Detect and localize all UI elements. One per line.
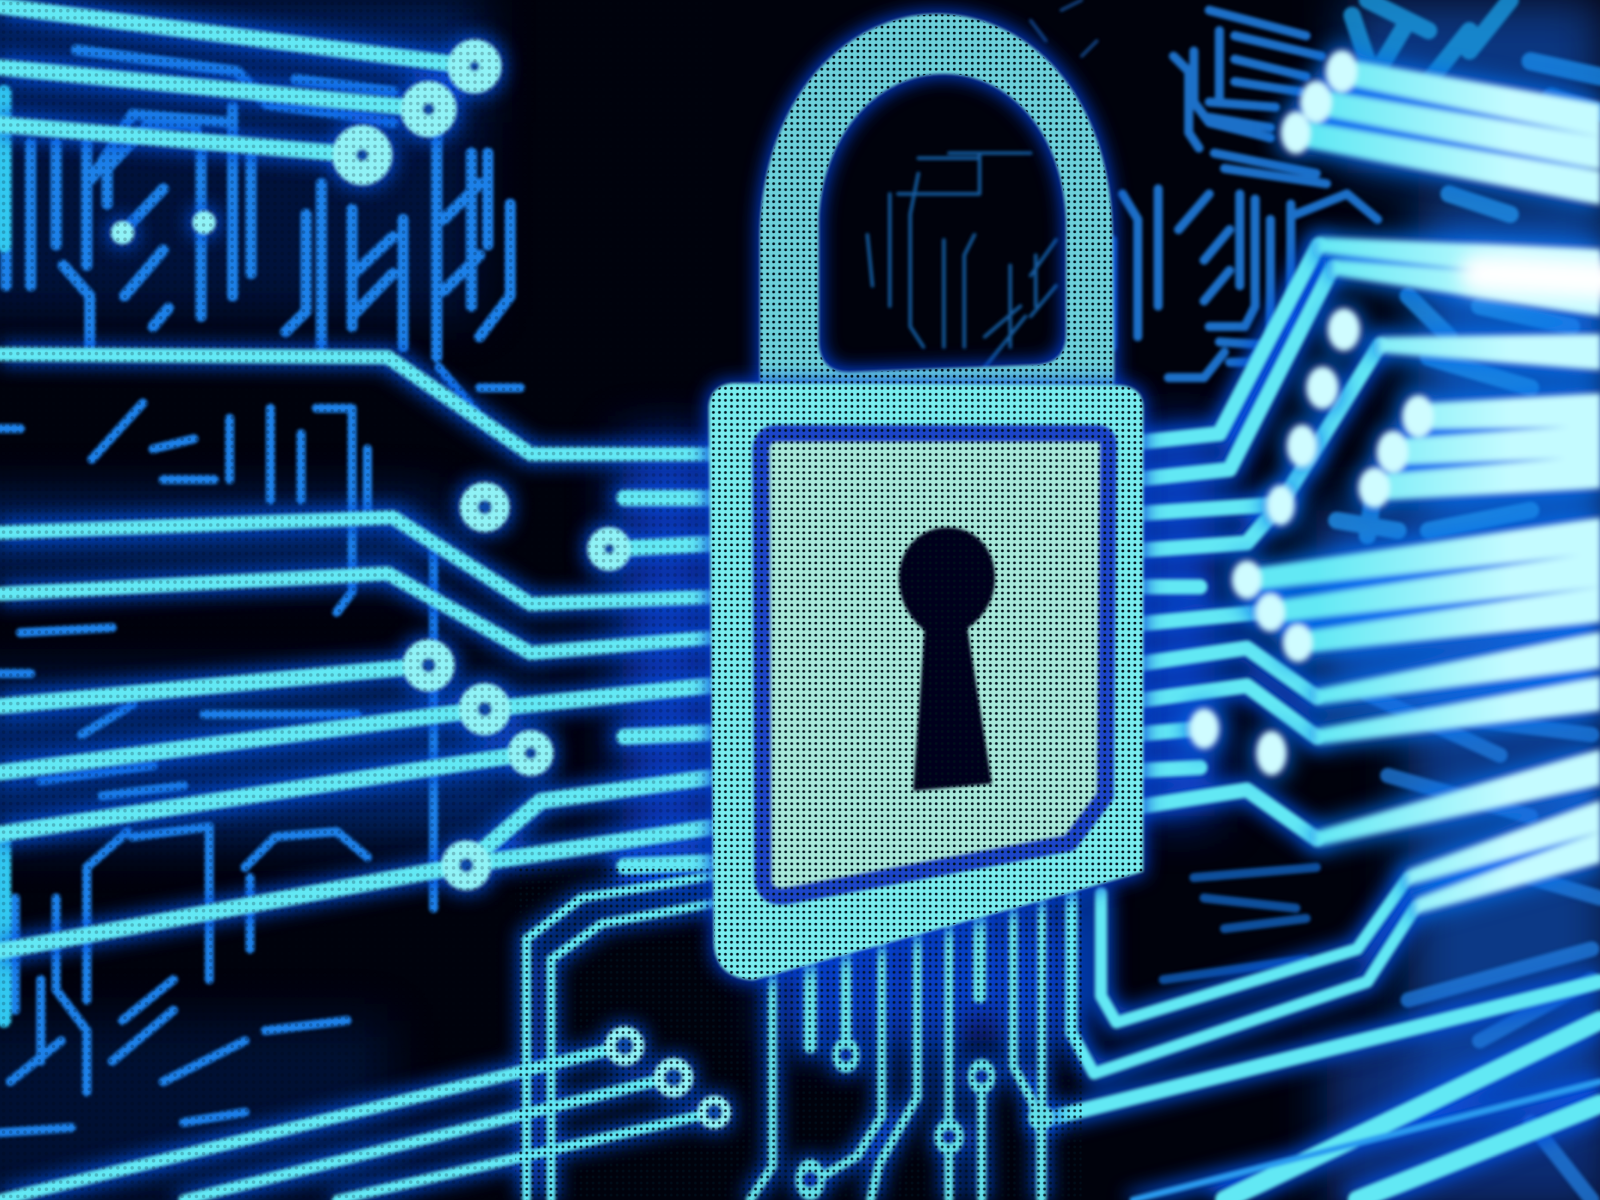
- keyhole: [899, 528, 995, 791]
- bead texture over traces: [0, 0, 714, 1200]
- padlock: [709, 14, 1143, 980]
- dot matrix overlay: [709, 384, 1143, 980]
- main circuit traces: right: [1041, 245, 1600, 1200]
- dot matrix over lower circuit: [515, 867, 1082, 1200]
- shackle: [760, 14, 1114, 398]
- secondary traces: left side: [0, 50, 520, 1133]
- bright beams and blobs: right: [1190, 51, 1600, 913]
- white-hot highlight on upper right beams: [1480, 273, 1600, 282]
- left pins: [609, 498, 709, 866]
- keyhole panel: [761, 434, 1108, 896]
- bottom pins and traces under lock: [750, 898, 1053, 1200]
- main circuit traces: left: [0, 6, 731, 1200]
- lock body: [709, 384, 1143, 980]
- left circuit nodes: [111, 40, 731, 1129]
- secondary traces: top right and centre: [867, 0, 1600, 1200]
